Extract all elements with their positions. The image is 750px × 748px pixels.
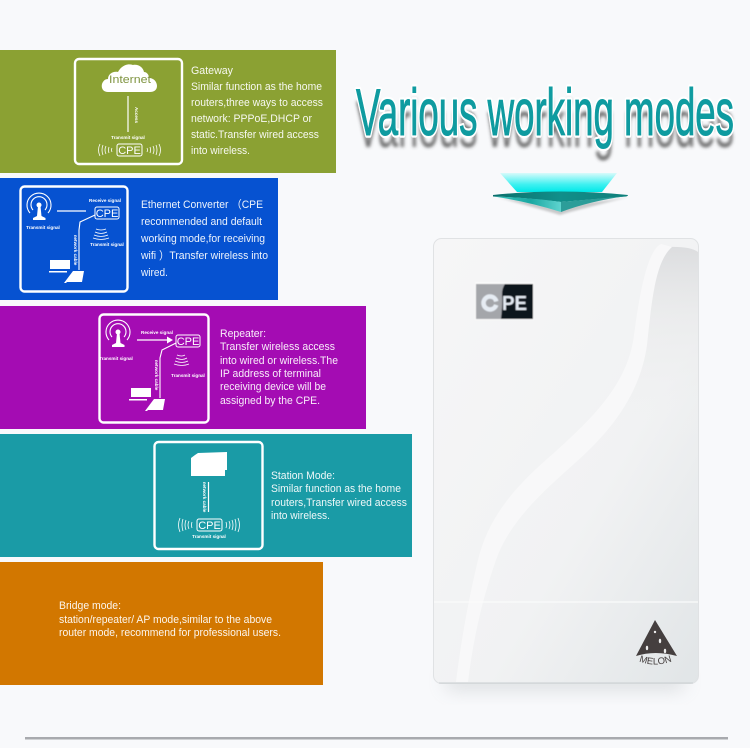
- icon: station mode diagram: network cable: [202, 482, 207, 513]
- icon: ethernet converter diagram: Transmit signal: [90, 242, 124, 247]
- text: ethernet converter description: wired.: [140, 267, 168, 279]
- device: CPE product photo: [433, 238, 699, 695]
- icon: ethernet converter diagram: network cable: [73, 235, 78, 266]
- icon: station mode diagram: Transmit signal: [192, 534, 226, 539]
- icon: gateway diagram: Access: [134, 107, 139, 123]
- text: repeater description: Transfer wireless access: [220, 341, 335, 353]
- text: ethernet converter description: [140, 198, 268, 279]
- text: ethernet converter description: wifi ）Transfer wireless into: [140, 249, 268, 262]
- icon: station mode diagram: [154, 442, 262, 549]
- text: bridge mode description: Bridge mode:: [59, 600, 121, 612]
- text: bridge mode description: station/repeater/ AP mode,similar to the above: [59, 614, 272, 626]
- text: repeater description: assigned by the CPE.: [220, 395, 320, 407]
- text: gateway description: Gateway: [191, 65, 233, 77]
- text: ethernet converter description: working mode,for receiving: [140, 233, 265, 245]
- panel: station mode: [0, 434, 412, 557]
- icon: repeater diagram: Transmit signal: [171, 373, 205, 378]
- text: station mode description: [271, 470, 407, 522]
- device label: CPE: PE: [502, 293, 527, 315]
- text: station mode description: routers,Transfer wired access: [271, 497, 407, 509]
- text: station mode description: Station Mode:: [271, 470, 335, 482]
- device label: CPE: [475, 282, 534, 320]
- icon: ethernet converter diagram: CPE: [96, 208, 118, 220]
- icon: repeater diagram: network cable: [154, 360, 159, 391]
- text: gateway description: network: PPPoE,DHCP or: [191, 113, 312, 125]
- text: station mode description: into wireless.: [271, 510, 330, 522]
- panel: ethernet converter: [0, 178, 278, 300]
- icon: gateway diagram: CPE: [118, 145, 141, 157]
- icon: repeater diagram: Transmit signal: [99, 356, 133, 361]
- device logo: MELON: [636, 620, 677, 664]
- text: gateway description: Similar function as the home: [191, 81, 322, 93]
- icon: repeater diagram: [99, 314, 208, 422]
- text: bridge mode description: [59, 600, 281, 639]
- text: repeater description: Repeater:: [220, 328, 266, 340]
- icon: ethernet converter diagram: [20, 186, 128, 292]
- text: bridge mode description: router mode, recommend for professional users.: [59, 627, 281, 639]
- arrow: [493, 173, 628, 215]
- icon: repeater diagram: CPE: [177, 336, 199, 348]
- panel: bridge mode: [0, 562, 323, 685]
- text: repeater description: IP address of terminal: [220, 368, 321, 380]
- icon: gateway diagram: [75, 59, 182, 164]
- text: gateway description: static.Transfer wired access: [191, 129, 319, 141]
- panel: repeater: [0, 306, 366, 429]
- text: station mode description: Similar function as the home: [271, 483, 401, 495]
- text: gateway description: [191, 65, 323, 157]
- text: ethernet converter description: Ethernet Converter （CPE: [141, 198, 263, 211]
- text: repeater description: receiving device will be: [220, 381, 326, 393]
- icon: ethernet converter diagram: Transmit signal: [26, 225, 60, 230]
- text: ethernet converter description: recommended and default: [141, 216, 262, 228]
- icon: gateway diagram: Internet: [109, 74, 151, 86]
- icon: ethernet converter diagram: Receive signal: [89, 198, 121, 203]
- text: gateway description: into wireless.: [191, 145, 250, 157]
- icon: repeater diagram: Receive signal: [141, 330, 173, 335]
- icon: gateway diagram: Transmit signal: [111, 135, 145, 140]
- panel: gateway: [0, 50, 336, 173]
- text: repeater description: into wired or wireless.The: [220, 355, 338, 367]
- text: repeater description: [220, 328, 338, 407]
- text: gateway description: routers,three ways to access: [191, 97, 323, 109]
- icon: station mode diagram: CPE: [198, 520, 221, 532]
- device logo: MELON: MELON: [640, 655, 672, 664]
